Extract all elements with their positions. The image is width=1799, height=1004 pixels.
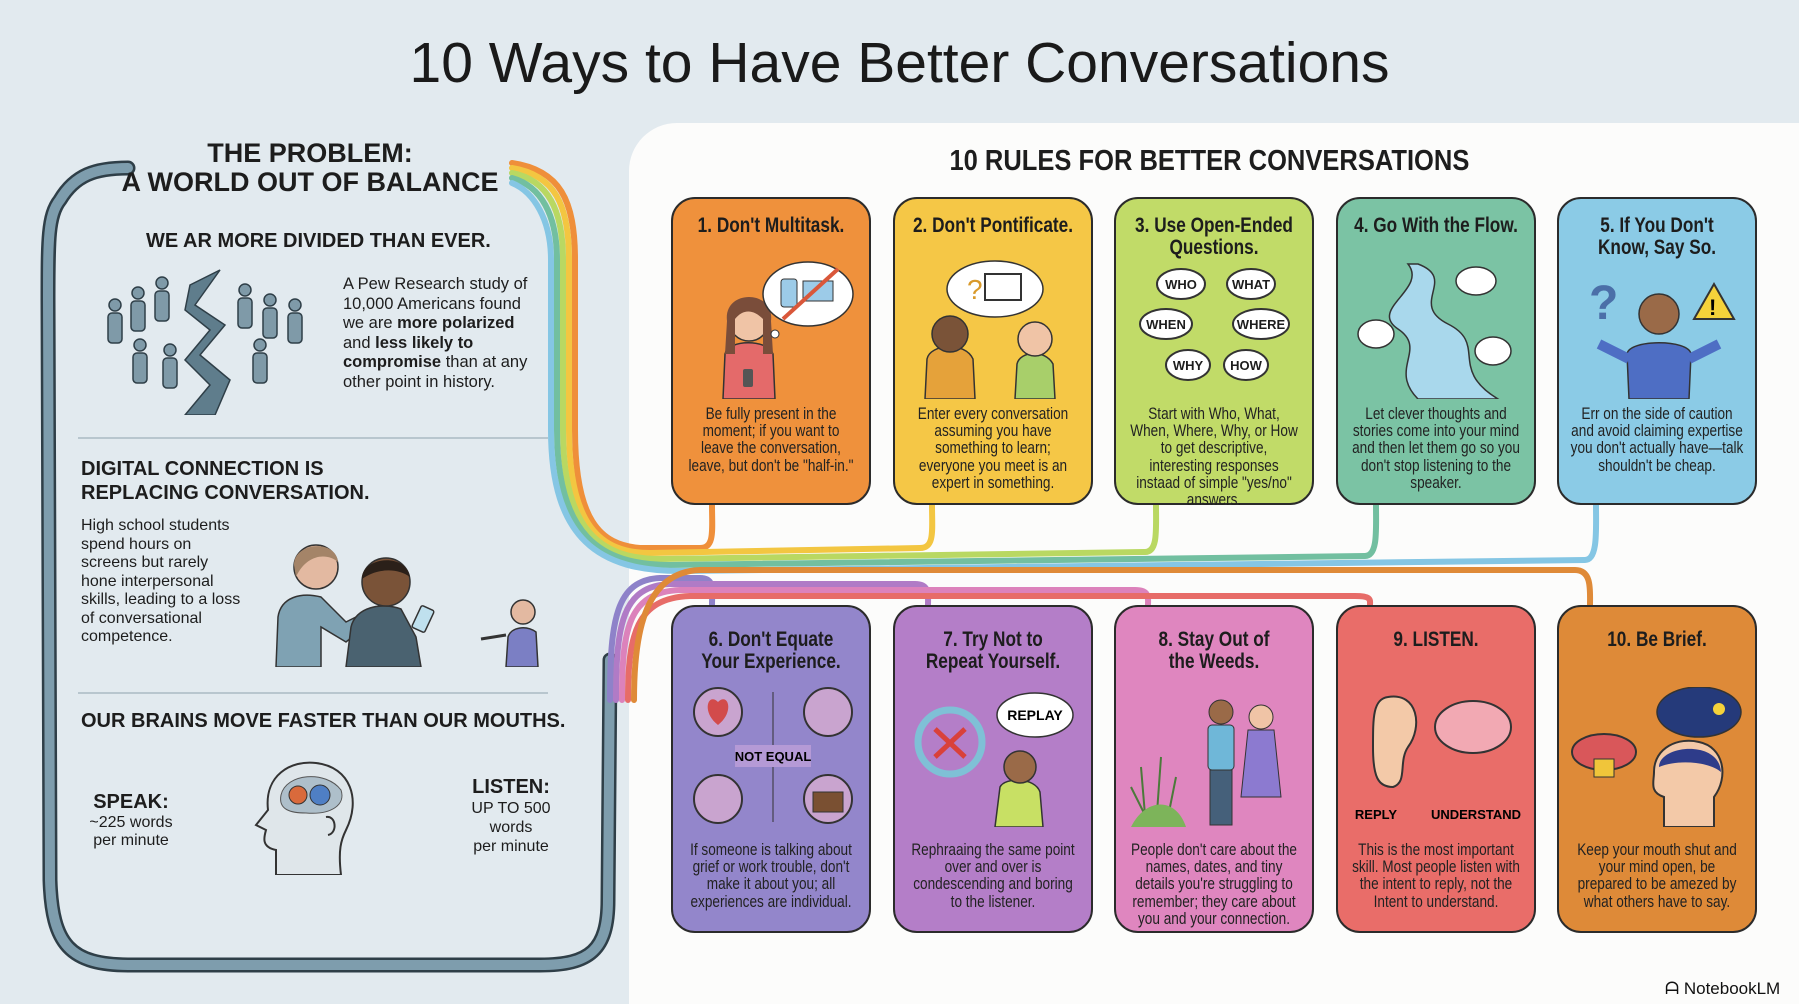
card 4: Let clever thoughts and stories come into your mind and then let them go so you don't stop listening to the speaker. — [1352, 404, 1520, 492]
icon: lips locked and head — [1571, 687, 1742, 827]
subheading digital: DIGITAL CONNECTION IS — [81, 458, 324, 480]
icon: two people talking — [924, 260, 1056, 399]
heading: rules: 10 RULES FOR BETTER CONVERSATIONS — [949, 145, 1469, 177]
card 1: 1. Don't Multitask. — [698, 214, 844, 237]
card 7: Rephraaing the same point over and over is condescending and boring to the listener. — [911, 840, 1075, 911]
subheading brains: OUR BRAINS MOVE FASTER THAN OUR MOUTHS. — [81, 710, 565, 732]
card 9: 9. LISTEN. — [1393, 628, 1479, 651]
card 4 — [1336, 197, 1536, 505]
card 9: This is the most important skill. Most people listen with the intent to reply, not the Intent to understand. — [1352, 840, 1520, 911]
logo: NotebookLM: ᗩ NotebookLM — [1665, 979, 1780, 998]
stat: listen: words — [490, 819, 532, 836]
card 2 — [893, 197, 1093, 505]
icon: river with thought clouds — [1357, 263, 1512, 399]
card 6: If someone is talking about grief or work trouble, don't make it about you; all experiences are individual. — [690, 840, 852, 911]
card 5: Err on the side of caution and avoid claiming expertise you don't actually have—talk shouldn't be cheap. — [1571, 404, 1743, 475]
card 5: Know, Say So. — [1598, 236, 1716, 259]
card 1 — [671, 197, 871, 505]
card 9 — [1336, 605, 1536, 933]
card 3 — [1114, 197, 1314, 505]
stat: speak: SPEAK: — [93, 791, 169, 813]
icon: shrugging man: ? — [1589, 277, 1618, 330]
card 1: Be fully present in the moment; if you want to leave the conversation, leave, but don't be "half-in." — [688, 404, 853, 475]
card 7: Repeat Yourself. — [926, 650, 1060, 673]
title: 10 Ways to Have Better Conversations — [410, 31, 1390, 95]
stat: listen — [471, 776, 551, 855]
icon: question word bubbles: WHO — [1165, 277, 1197, 292]
heading: the problem: THE PROBLEM: — [207, 138, 413, 168]
icon: question word bubbles — [1139, 268, 1290, 381]
white rules panel — [629, 123, 1799, 1004]
card 3: 3. Use Open-Ended — [1135, 214, 1293, 237]
icon: divided crowd — [107, 269, 303, 415]
icon: ear and brain: UNDERSTAND — [1431, 807, 1521, 822]
stat: speak: ~225 words — [89, 814, 173, 831]
icon: not equal circles: NOT EQUAL — [735, 749, 811, 764]
icon: question word bubbles: WHY — [1173, 358, 1203, 373]
icon: two people talking: ? — [967, 274, 983, 305]
section: brains faster — [81, 710, 565, 875]
left panel: the problem — [78, 138, 565, 875]
card 8 — [1114, 605, 1314, 933]
text: pew research: A Pew Research study of 10,000 Americans found we are more polarized and less likely to compromise than at any other point in history. — [343, 275, 527, 390]
card 6: 6. Don't Equate — [709, 628, 833, 651]
icon: ear and brain — [1355, 696, 1521, 822]
card 2: Enter every conversation assuming you have something to learn; everyone you meet is an expert in something. — [918, 404, 1068, 492]
card 10 — [1557, 605, 1757, 933]
icon: shrugging man — [1589, 277, 1736, 399]
icon: question word bubbles: WHEN — [1146, 317, 1186, 332]
card 4: 4. Go With the Flow. — [1354, 214, 1518, 237]
stat: speak: per minute — [93, 832, 169, 849]
section: digital connection — [81, 458, 539, 667]
icon: question word bubbles: WHAT — [1232, 277, 1270, 292]
stat: listen: LISTEN: — [472, 776, 550, 798]
card 6 — [671, 605, 871, 933]
card 10: 10. Be Brief. — [1607, 628, 1707, 651]
stat: listen: per minute — [473, 838, 549, 855]
card 3: Start with Who, What, When, Where, Why, or How to get descriptive, interesting responses instaad of simple "yes/no" answers. — [1130, 404, 1298, 509]
section: divided — [107, 230, 528, 415]
icon: shrugging man: ! — [1709, 295, 1716, 320]
card 8: People don't care about the names, dates, and tiny details you're struggling to remember; they care about you and your connection. — [1131, 840, 1297, 928]
icon: couple with weeds — [1130, 700, 1282, 827]
subheading divided: WE AR MORE DIVIDED THAN EVER. — [146, 230, 491, 252]
card 7 — [893, 605, 1093, 933]
card 2: 2. Don't Pontificate. — [913, 214, 1073, 237]
text: students: High school students spend hours on screens but rarely hone interpersonal skills, leading to a loss of conversational competence. — [81, 517, 240, 645]
card 7: 7. Try Not to — [943, 628, 1043, 651]
icon: not equal circles — [693, 687, 853, 824]
card 5: 5. If You Don't — [1600, 214, 1714, 237]
subheading digital — [81, 458, 370, 504]
card 5 — [1557, 197, 1757, 505]
stat: listen: UP TO 500 — [471, 800, 551, 817]
heading: the problem — [122, 138, 498, 197]
icon: question word bubbles: WHERE — [1237, 317, 1286, 332]
card 3: Questions. — [1170, 236, 1258, 259]
heading: the problem: A WORLD OUT OF BALANCE — [122, 167, 498, 197]
icon: replay cycle: REPLAY — [1007, 707, 1063, 723]
card 8: the Weeds. — [1169, 650, 1259, 673]
icon: people on phones — [275, 544, 539, 667]
icon: question word bubbles: HOW — [1230, 358, 1263, 373]
card 10: Keep your mouth shut and your mind open, be prepared to be amezed by what others have to say. — [1577, 840, 1737, 911]
icon: woman with phone — [722, 261, 854, 399]
subheading digital: REPLACING CONVERSATION. — [81, 482, 370, 504]
icon: head with gears — [254, 762, 354, 875]
icon: replay cycle — [914, 692, 1074, 827]
stat: speak — [89, 791, 173, 849]
card 6: Your Experience. — [701, 650, 841, 673]
icon: ear and brain: REPLY — [1355, 807, 1397, 822]
card 8: 8. Stay Out of — [1158, 628, 1269, 651]
